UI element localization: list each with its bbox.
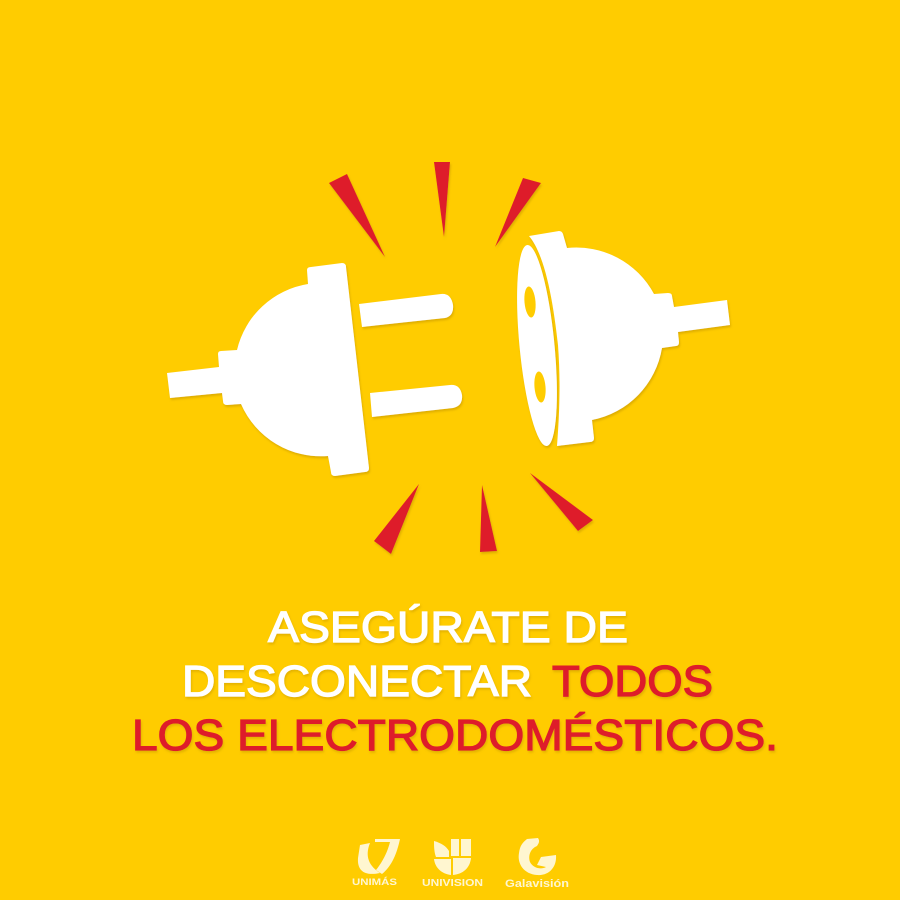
socket hole: bottom [533, 371, 547, 403]
headline [132, 603, 778, 760]
logo: UniMás: UNIMÁS [352, 877, 397, 887]
logo: Galavisión: Galavisión [505, 878, 569, 890]
spark rays [329, 162, 593, 554]
headline: ASEGÚRATE DE [268, 603, 628, 652]
socket hole: top [523, 286, 537, 318]
logo: Univision: UNIVISION [422, 878, 483, 889]
headline: DESCONECTAR [182, 657, 532, 706]
logo: Galavisión [505, 838, 569, 890]
headline: TODOS [552, 657, 713, 706]
headline: LOS ELECTRODOMÉSTICOS. [132, 711, 778, 760]
icon: socket [510, 231, 730, 448]
icon: plug [167, 263, 462, 476]
plug prong: bottom [370, 385, 462, 417]
logo: UniMás [352, 839, 400, 887]
logo: Univision [422, 839, 483, 889]
plug prong: top [359, 294, 453, 327]
socket face [510, 243, 564, 448]
